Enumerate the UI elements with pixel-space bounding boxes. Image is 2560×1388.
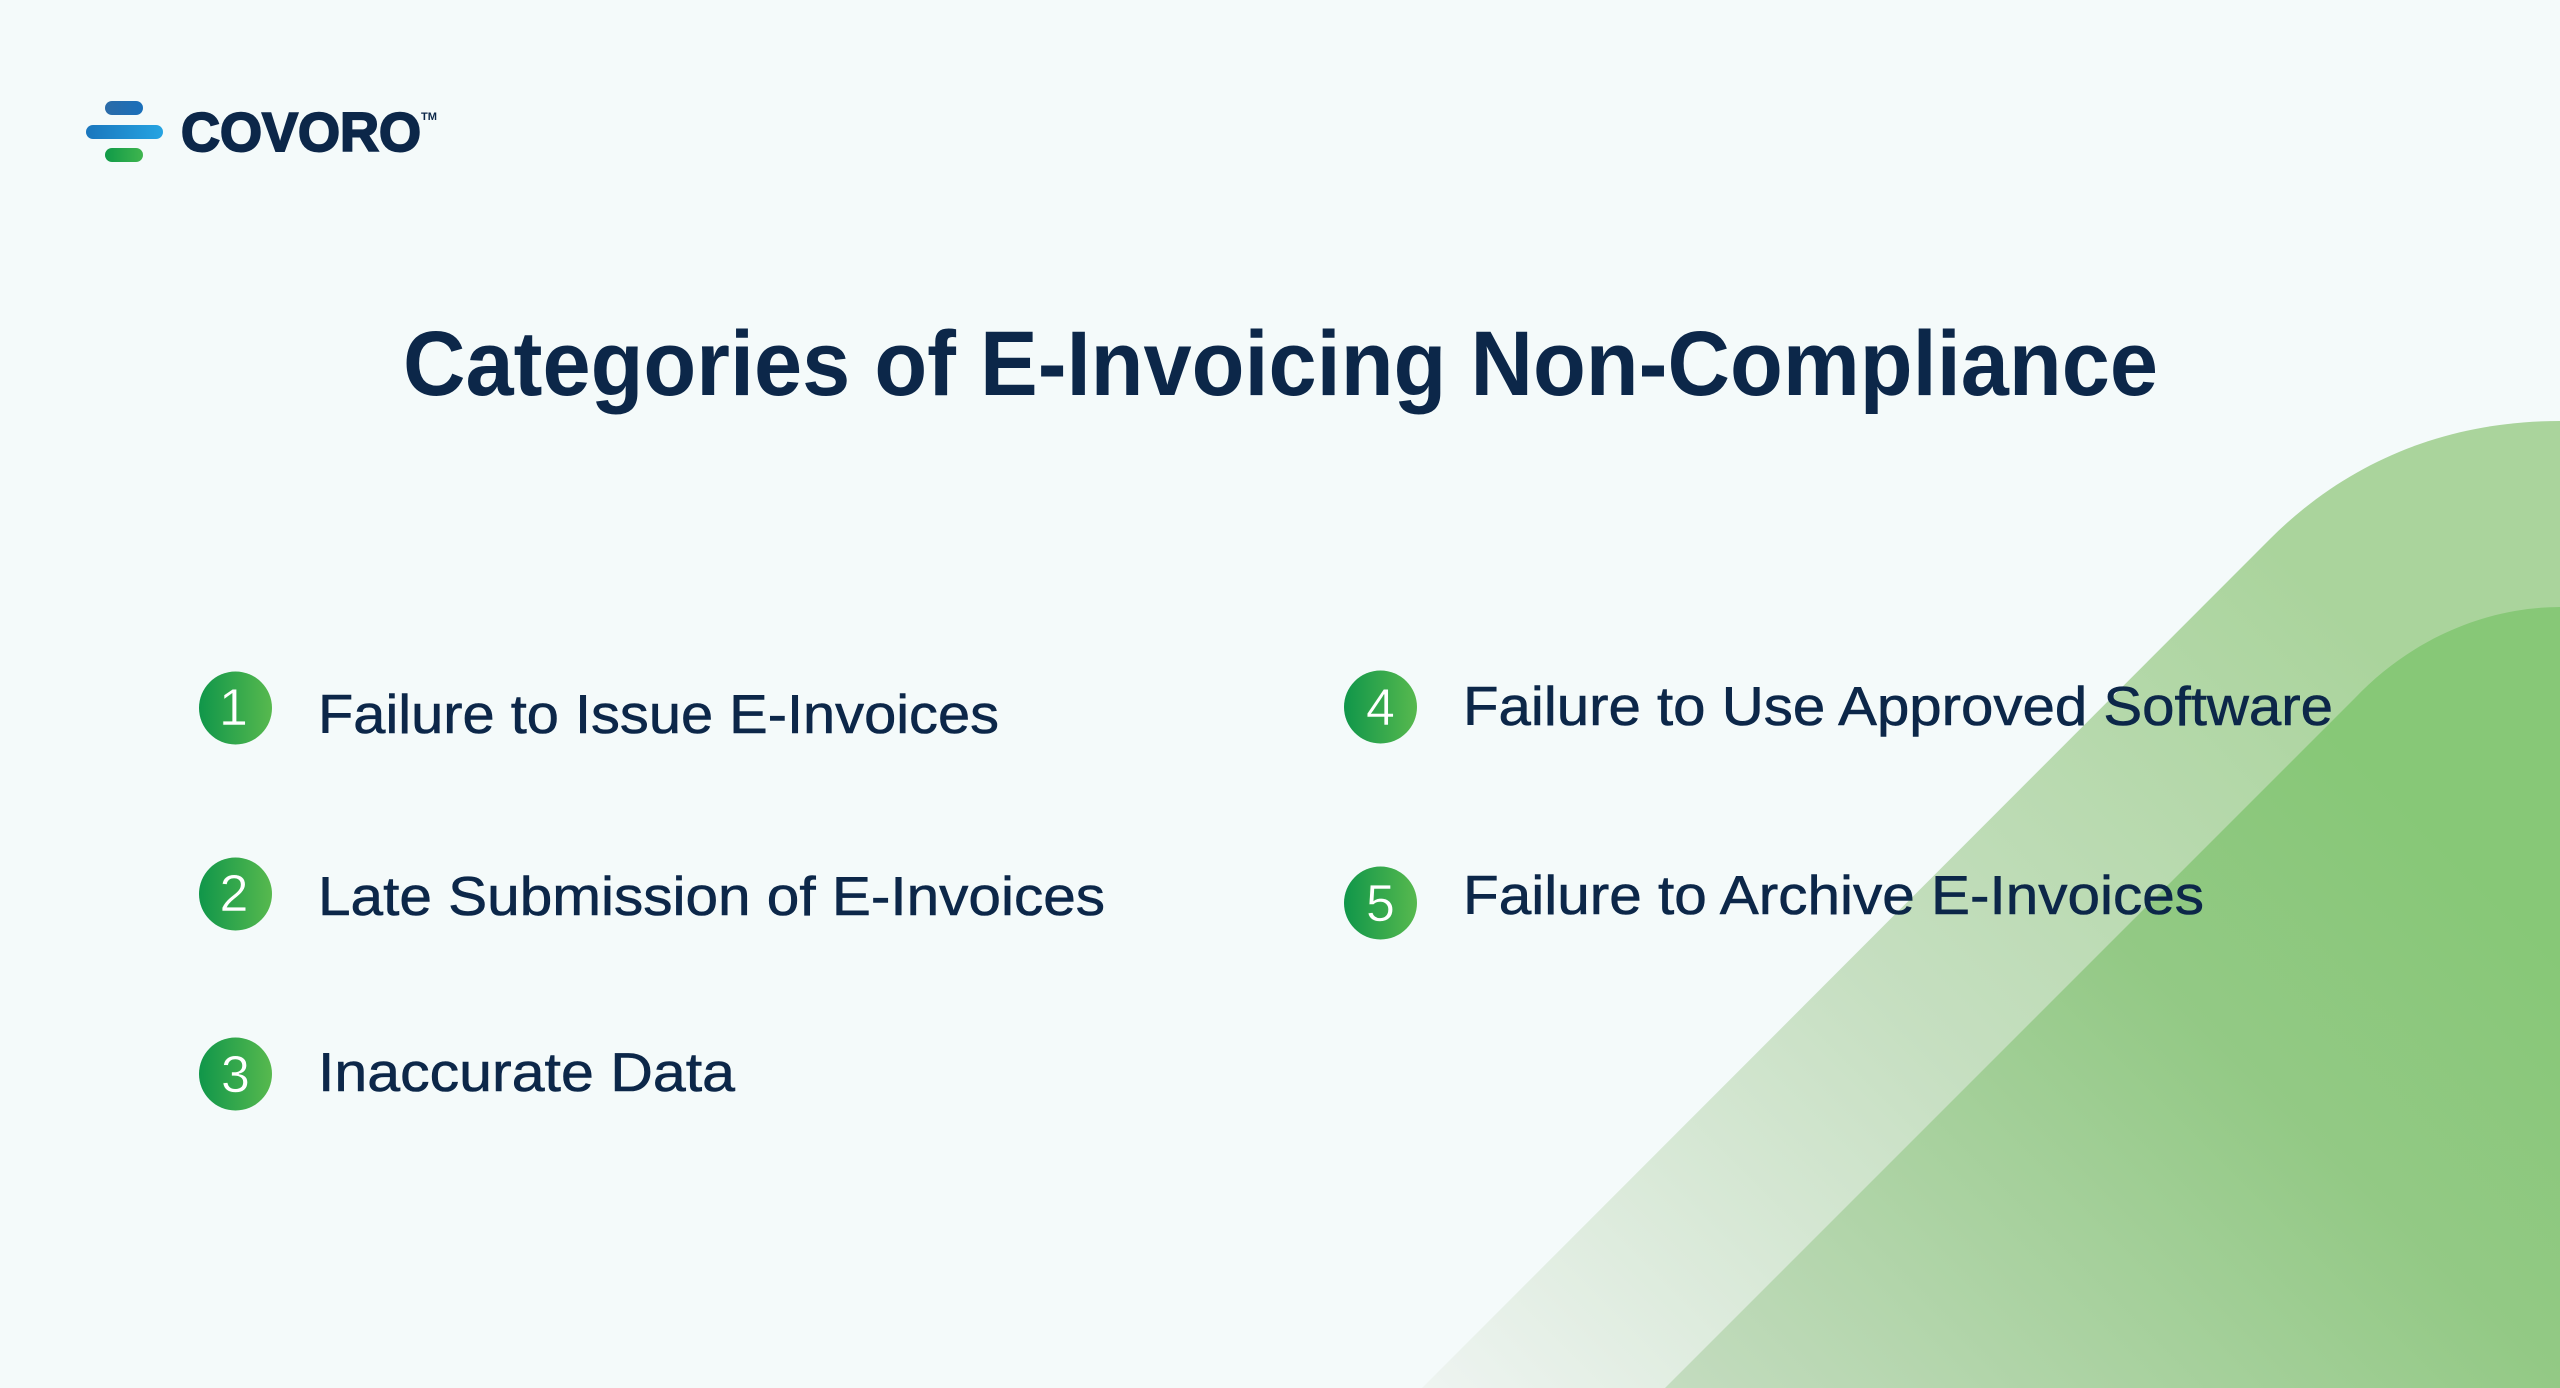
number badge 4: 4 — [1366, 679, 1395, 737]
item text 1: Failure to Issue E-Invoices — [318, 683, 999, 745]
number badge 3: 3 — [221, 1046, 250, 1104]
list item 2 — [199, 858, 1105, 930]
title: Categories of E-Invoicing Non-Compliance — [403, 313, 2158, 415]
item text 3: Inaccurate Data — [318, 1041, 735, 1103]
item text 4: Failure to Use Approved Software — [1463, 675, 2333, 737]
item text 5: Failure to Archive E-Invoices — [1463, 864, 2204, 926]
logo: Covoro — [86, 101, 437, 163]
number badge 1 — [199, 672, 272, 744]
number badge 5: 5 — [1366, 875, 1395, 933]
logo wordmark: COVORO — [181, 101, 421, 163]
number badge 1: 1 — [219, 679, 248, 737]
number badge 2: 2 — [220, 865, 248, 923]
logo icon: three bars — [86, 101, 163, 162]
number badge 3 — [199, 1038, 272, 1110]
item text 2: Late Submission of E-Invoices — [318, 865, 1105, 927]
background shape: outer light green — [1422, 421, 2560, 1388]
number badge 5 — [1344, 866, 1417, 940]
number badge 4 — [1344, 670, 1417, 744]
trademark: TM — [421, 111, 437, 123]
list item 5 — [1344, 864, 2204, 940]
list item 3 — [199, 1038, 735, 1110]
list item 1 — [199, 672, 999, 745]
background shape: inner green — [1665, 607, 2560, 1388]
number badge 2 — [199, 858, 272, 930]
list item 4 — [1344, 670, 2333, 744]
